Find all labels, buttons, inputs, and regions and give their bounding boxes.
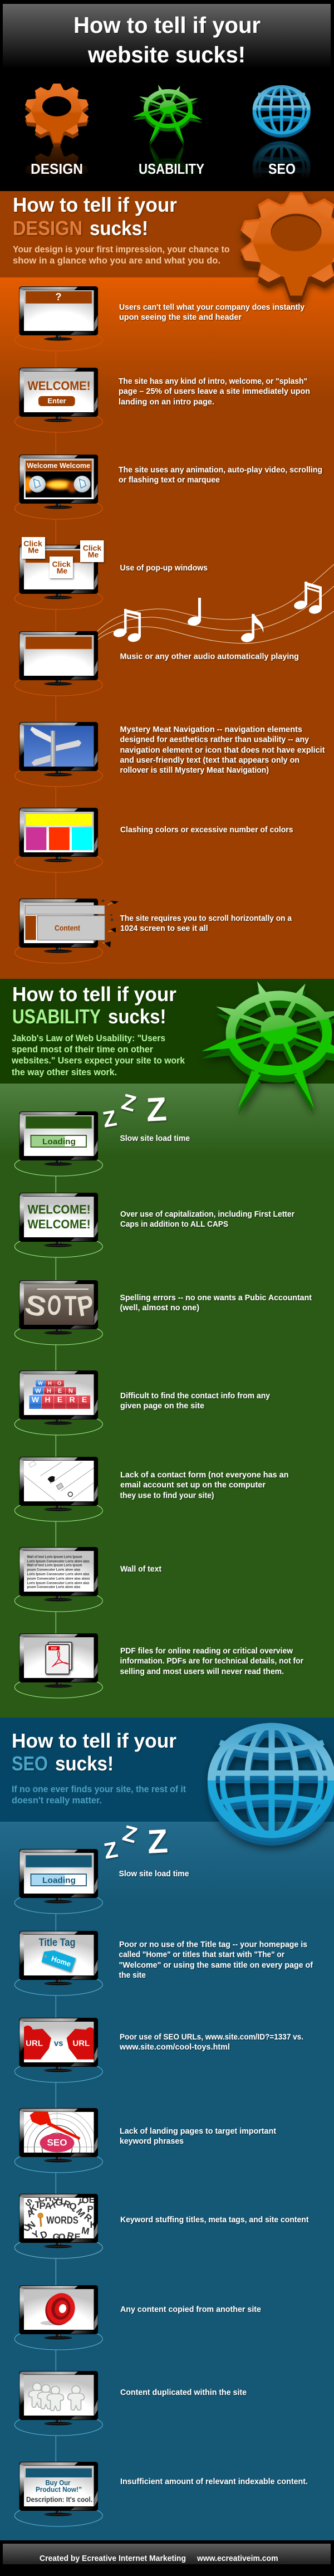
caption: The site uses any animation, auto-play video, scrolling [119,466,322,475]
pop-up: click me 1: Click [23,539,42,548]
monitor: url vs url: vs [54,2039,63,2048]
intro text: usability: Jakob's Law of Web Usability: "Users [12,1033,165,1043]
monitor: scattered letters: O [58,2232,66,2242]
heading: design: DESIGN [13,217,82,240]
heading: usability: How to tell if your [12,983,176,1006]
monitor: scattered letters: E [89,2194,95,2205]
caption: Caps in addition to ALL CAPS [120,1220,228,1229]
monitor: title tag [19,1931,98,1985]
icon: sleeping z's: Z [146,1822,169,1861]
icon: sleeping z's: Z [145,1090,168,1129]
monitor: buy our product [19,2462,98,2516]
caption: 1024 screen to see it all [120,924,208,933]
monitor: scattered letters: M [74,2207,87,2219]
icon: sleeping z's: Z [119,1090,139,1116]
item: contact form [14,1457,289,1547]
monitor: scattered letters: Q [68,2201,77,2212]
monitor: who when where cubes: W [32,1395,40,1404]
heading: usability: USABILITY [12,1005,101,1028]
monitor: scattered letters: K [28,2202,39,2215]
item: over-capitalization [14,1193,294,1280]
item: title tag [14,1931,313,2018]
caption: Keyword stuffing titles, meta tags, and site content [120,2216,309,2224]
caption: Clashing colors or excessive number of colors [120,826,293,835]
caption: landing on an intro page. [119,398,214,407]
caption: they use to find your site) [120,1491,214,1500]
monitor: loading bar: Loading [42,1137,76,1146]
monitor: who when where cubes: H [45,1395,51,1404]
monitor: who when where cubes: N [68,1388,73,1394]
item: auto-play music [14,564,334,722]
monitor: who when where cubes [19,1370,98,1425]
monitor: scattered letters: M [81,2225,90,2237]
icon: large globe [209,1724,334,1844]
monitor: scattered letters: K [90,2219,97,2230]
monitor: who when where cubes: R [69,1395,75,1404]
intro text: usability: the way other sites work. [12,1067,117,1077]
caption: called "Home" or titles that start with "The" or [119,1950,284,1959]
caption: Music or any other audio automatically playing [120,652,299,661]
monitor: scattered letters: R [62,2198,72,2211]
icon: sleeping z's [101,1090,168,1133]
pop-up: click me 2 [80,540,104,562]
monitor: scattered letters: X [49,2198,58,2210]
caption [120,725,325,775]
caption [119,2033,303,2052]
item: contact info [14,1370,270,1457]
icon: sleeping z's: Z [120,1821,140,1848]
caption: Wall of text [120,1565,161,1574]
caption: rollover is still Mystery Meat Navigation) [120,766,269,775]
item: landing pages [14,2108,276,2194]
monitor: loading bar: Loading [42,1876,76,1885]
monitor: wall of text: Loris Ipsum Consecutor Loris alore alas [27,1572,90,1576]
monitor: scattered letters: D [39,2228,49,2241]
intro text: seo: doesn't really matter. [12,1796,102,1806]
monitor: buy our product: Buy Our [46,2479,71,2487]
caption: Over use of capitalization, including First Letter [120,1210,294,1219]
monitor: scattered letters: C [38,2193,45,2204]
monitor: sotp road: O [46,1289,62,1321]
intro text: design: show in a glance who you are and what you do. [13,256,220,266]
label: seo: SEO [268,160,296,177]
caption [119,303,304,322]
caption: (well, almost no one) [120,1304,199,1313]
monitor: flaming soccer balls [19,455,98,509]
icon: sleeping z's [102,1821,169,1864]
caption: Poor use of SEO URLs, www.site.com/ID?=1337 vs. [120,2033,303,2042]
pop-up: click me 1: Me [28,546,39,555]
heading: design: How to tell if your [13,193,177,216]
monitor: scattered letters: T [35,2199,41,2210]
intro text: design: Your design is your first impression, your chance to [13,245,229,255]
pop-up: click me 3: Click [52,560,71,569]
monitor: loading bar [19,1111,98,1165]
footer [0,2540,334,2576]
monitor: scattered letters: P [87,2204,94,2214]
pop-up: click me 2: Me [88,550,99,559]
caption [119,377,310,407]
pop-up: click me 3 [50,557,73,578]
item: mystery meat navigation [14,722,325,808]
monitor: who when where cubes: E [82,1395,87,1404]
intro text: seo [12,1784,186,1806]
caption [120,914,292,933]
monitor: clashing colours [19,808,98,862]
title [73,12,261,67]
music staff and notes [97,564,334,643]
monitor: scattered letters: Y [31,2228,42,2241]
item: pop-ups [14,537,208,631]
caption: Spelling errors -- no one wants a Pubic Accountant [120,1294,312,1302]
monitor: plain page [19,631,98,685]
caption: upon seeing the site and header [119,313,242,322]
item: horizontal scroll [14,899,292,963]
monitor: scattered letters: E [75,2232,81,2242]
label: usability: USABILITY [139,160,204,177]
intro text: design [13,245,229,266]
monitor: wall of text [19,1547,98,1601]
monitor: who when where cubes: E [58,1388,62,1394]
caption: designed for aesthetics rather than usability -- any [120,735,309,744]
label: design: DESIGN [31,160,83,177]
intro panel [0,0,334,205]
monitor: flaming soccer balls: Welcome Welcome [27,461,90,470]
icon: sleeping z's: Z [101,1106,119,1133]
heading: design: sucks! [90,217,148,240]
title: website sucks! [87,42,245,67]
intro text: usability: websites." Users expect your site to work [11,1056,185,1066]
monitor: cookie cutter people [19,2371,98,2426]
caption [120,1294,312,1313]
caption: given page on the site [120,1402,204,1411]
caption: Slow site load time [120,1134,190,1143]
item: seo urls [14,2018,303,2108]
caption [119,466,322,485]
caption: Content duplicated within the site [120,2388,247,2397]
item: copied content [14,2285,261,2371]
monitor: scattered letters: R [66,2230,75,2242]
caption: keyword phrases [120,2137,184,2146]
caption: Insufficient amount of relevant indexable content. [120,2477,308,2486]
caption: "Welcome" or using the same title on every page of [119,1961,313,1970]
monitor: question mark: ? [56,291,61,303]
monitor: scattered letters: N [26,2219,38,2232]
monitor: who when where cubes: W [35,1388,41,1394]
icon: seo globe [253,86,310,137]
monitor: scattered letters: A [45,2201,52,2211]
heading: seo [12,1729,176,1775]
monitor: overflowing content [19,899,105,953]
caption: Difficult to find the contact info from any [120,1392,270,1401]
item: unclear header [14,286,304,368]
monitor: sotp road: S [22,1289,50,1323]
monitor: scattered letters [19,2192,98,2248]
item: keyword stuffing [14,2192,309,2285]
monitor: welcome welcome: WELCOME! [28,1202,90,1216]
monitor: wall of text: psum Consecutor Loris alore alas [27,1585,81,1589]
monitor: scattered letters: O [81,2195,89,2206]
panel: seo [0,1718,334,2540]
monitor: url vs url [19,2018,98,2072]
icon: design gear [24,84,90,147]
item: animation [14,455,322,545]
footer credit: Created by Ecreative Internet Marketing [40,2554,186,2563]
monitor: scattered letters: A [25,2207,36,2219]
monitor: pdf icon [19,1633,98,1688]
caption: Lack of landing pages to target important [120,2127,276,2136]
monitor: seo dart target: SEO [47,2138,67,2148]
monitor: pop-up windows [19,537,104,599]
item: duplicate content [14,2371,247,2462]
monitor: welcome welcome [19,1193,98,1247]
heading: seo: How to tell if your [12,1729,176,1752]
heading: usability [12,983,176,1028]
monitor: sotp road: P [75,1289,96,1323]
monitor: question mark [19,286,98,341]
monitor: welcome welcome: WELCOME! [28,1217,90,1231]
caption: or flashing text or marquee [119,476,220,485]
caption: Any content copied from another site [120,2305,261,2314]
heading: design [13,193,177,240]
monitor: scattered letters: P [39,2201,46,2211]
monitor: scattered letters: S [23,2197,34,2209]
monitor: buy our product: Product Now!” [36,2486,82,2494]
caption: Lack of a contact form (not everyone has an [120,1471,288,1480]
icon reflections [0,142,334,205]
caption: PDF files for online reading or critical overview [120,1647,293,1656]
caption: Users can't tell what your company does instantly [119,303,304,312]
caption [120,1647,303,1676]
caption: Mystery Meat Navigation -- navigation elements [120,725,302,734]
monitor: who when where cubes: O [57,1380,61,1386]
monitor: buy our product: Description: It's cool. [26,2496,92,2504]
monitor: sotp road: T [65,1290,77,1321]
caption: the site [119,1971,146,1980]
item: thin content [14,2462,308,2526]
monitor: scattered letters: G [56,2197,63,2208]
caption: Poor or no use of the Title tag -- your homepage is [119,1940,307,1949]
monitor: pdf icon: PDF [51,1647,57,1651]
caption [120,1471,288,1500]
caption: navigation element or icon that does not have explicit [120,746,325,755]
caption: email account set up on the computer [120,1481,266,1490]
caption: The site has any kind of intro, welcome, or "splash" [119,377,307,386]
monitor: title tag: Home [50,1954,72,1968]
monitor: contact icons [19,1457,98,1511]
caption: selling and most users will never read them. [120,1667,284,1676]
monitor: copyright symbol [19,2285,98,2340]
monitor: who when where cubes: H [47,1388,51,1394]
icon: sleeping z's: Z [102,1837,120,1864]
caption: Slow site load time [119,1870,189,1879]
monitor: sotp road [19,1280,98,1335]
caption: The site requires you to scroll horizontally on a [120,914,292,923]
item: splash page [14,368,310,455]
caption [120,2127,276,2146]
panel: usability [0,979,334,1718]
item: slow load [14,1090,190,1193]
footer url: www.ecreativeim.com [197,2554,278,2563]
monitor: url vs url: URL [26,2039,43,2048]
monitor: wall of text: psum Consecutor Loris alore alas alass [27,1577,90,1580]
monitor: wall of text: Wall of text Loris Ipsum Loris Ipsum [27,1564,82,1568]
monitor: seo dart target [19,2108,98,2163]
intro text: usability [11,1033,185,1077]
monitor: signpost [19,722,98,777]
intro text: seo: If no one ever finds your site, the rest of it [12,1784,186,1794]
item: pdf files [14,1633,303,1698]
item: slow load [14,1821,189,1931]
pop-up: click me 1 [22,537,45,559]
monitor: wall of text: Wall of text Loris Ipsum Loris Ipsum [27,1555,82,1559]
monitor: welcome enter: WELCOME! [28,379,90,393]
monitor: title tag: Title Tag [39,1937,76,1949]
caption: and user-friendly text (text that appears only on [120,756,299,765]
heading: seo: SEO [12,1752,48,1775]
screen shards [101,899,119,948]
caption: information. PDFs are for technical details, not for [120,1657,303,1666]
intro text: usability: spend most of their time on other [12,1045,154,1055]
monitor: welcome enter: Enter [47,397,66,405]
monitor: wall of text: psum Consecutor Loris alore alas [27,1568,81,1572]
monitor: wall of text: Loris Ipsum Consecutor Loris alore alas [27,1581,90,1585]
monitor: who when where cubes: W [38,1380,43,1386]
monitor: url vs url: URL [72,2039,90,2048]
monitor: who when where cubes: H [48,1380,52,1386]
monitor: scattered letters: L [60,2196,66,2207]
monitor: scattered letters: H [45,2193,52,2203]
title: How to tell if your [73,12,261,38]
monitor: scattered letters: WORDS [46,2214,78,2226]
caption: www.site.com/cool-toys.html [119,2043,230,2052]
pop-up: click me 2: Click [83,544,101,553]
caption: page – 25% of users leave a site immediately upon [119,387,310,396]
monitor: scattered letters: U [21,2223,33,2233]
monitor: scattered letters: Y [74,2197,86,2209]
item: spelling errors [14,1280,312,1370]
caption [120,1392,270,1411]
caption [120,1210,294,1229]
heading: seo: sucks! [55,1752,114,1775]
item: wall of text [14,1547,161,1633]
icon: large gear [239,192,334,302]
pop-up: click me 3: Me [57,567,67,575]
monitor: overflowing content: Content [55,924,80,933]
heading: usability: sucks! [108,1005,166,1028]
caption [119,1940,313,1980]
monitor: scattered letters: G [52,2232,60,2242]
icon: large wheel [202,981,334,1115]
monitor: scattered letters: U [52,2192,60,2203]
monitor: wall of text: Loris Ipsum Consecutor Loris alore alas [27,1559,90,1563]
monitor: loading bar [19,1849,98,1903]
monitor: welcome enter [19,368,98,422]
icon: usability wheel [132,85,203,147]
monitor: scattered letters: R [82,2212,94,2224]
monitor: who when where cubes: E [57,1395,62,1404]
panel: design [0,191,334,979]
caption: Use of pop-up windows [120,564,208,573]
item: clashing colors [14,808,293,899]
